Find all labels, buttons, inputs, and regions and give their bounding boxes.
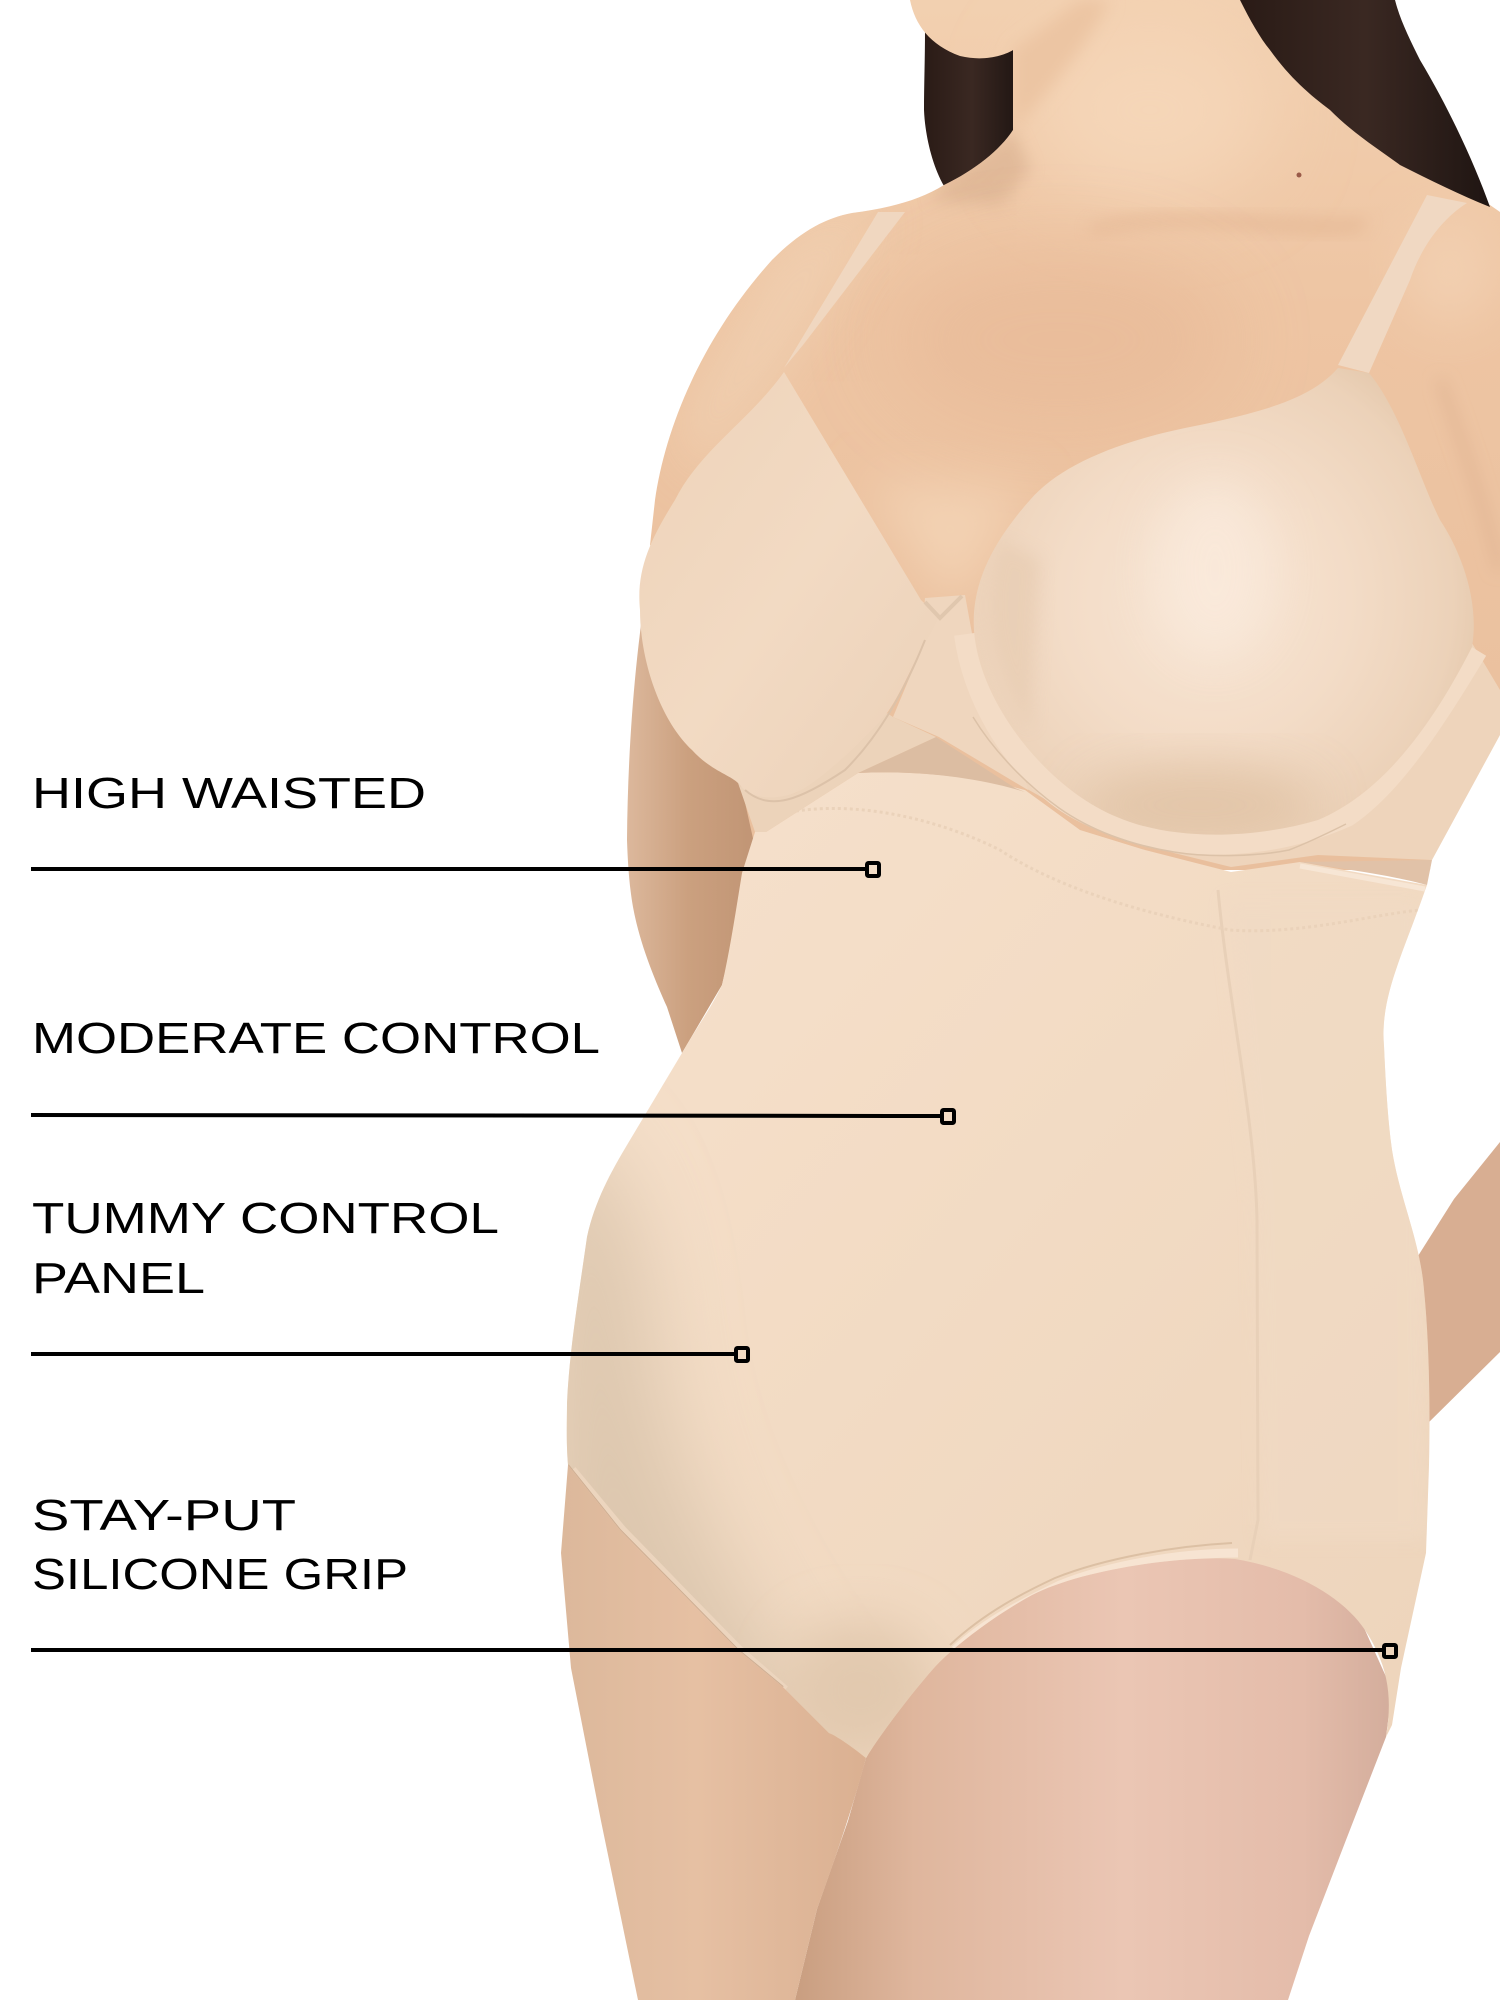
far strap (784, 212, 905, 368)
hair over shoulder (1240, 0, 1490, 207)
label: moderate control: MODERATE CONTROL (32, 1014, 600, 1063)
far cup seam (745, 640, 925, 801)
near cup (960, 360, 1490, 845)
left leg hem (572, 1470, 785, 1690)
callout: tummy control panel (31, 1194, 748, 1361)
centre bridge (893, 595, 1028, 790)
cup highlight (1175, 493, 1258, 610)
leader line and marker (31, 863, 879, 876)
label: tummy control panel: TUMMY CONTROL (32, 1194, 498, 1243)
left side shading (566, 1164, 779, 1677)
neck shadow under hair (940, 134, 1028, 205)
label: stay-put silicone grip: SILICONE GRIP (32, 1550, 408, 1599)
neck highlight (1008, 52, 1246, 196)
far cup (639, 372, 939, 798)
far forearm (1418, 1142, 1500, 1429)
figure: model wearing high-waisted shaper (540, 0, 1500, 2000)
side band (1020, 643, 1500, 867)
right arm crease (1440, 380, 1500, 570)
mole (1296, 172, 1302, 178)
collarbone shading (1112, 214, 1354, 232)
callout: stay-put silicone grip (31, 1491, 1396, 1657)
left leg hem edge (568, 1465, 783, 1687)
waist stitching (790, 808, 1420, 931)
near thigh (795, 1500, 1392, 2000)
leader line and marker (31, 1110, 954, 1123)
torso skin (640, 0, 1500, 880)
sheer mesh gap (858, 737, 1025, 792)
far arm (627, 520, 780, 1053)
far cup under band (738, 713, 936, 832)
sheer mesh gap right (1300, 860, 1432, 885)
chest warm tone (1003, 303, 1117, 356)
side panel light (1384, 944, 1406, 1200)
cleavage highlight (890, 480, 1008, 587)
underwire channel (967, 634, 1475, 842)
callout: high waisted (31, 769, 879, 876)
grip edge (950, 1543, 1232, 1645)
panty shaper (540, 760, 1450, 1770)
underwire seam (973, 717, 1346, 856)
label: high waisted: HIGH WAISTED (32, 769, 426, 818)
bra (639, 195, 1500, 885)
leader line and marker (31, 1645, 1396, 1657)
top hem (1300, 866, 1425, 889)
label: stay-put silicone grip: STAY-PUT (32, 1491, 295, 1540)
side seam (1218, 890, 1258, 1560)
silicone grip (955, 1553, 1238, 1650)
shoulder light (700, 256, 832, 432)
hair behind neck (924, 30, 1020, 186)
callout: moderate control (31, 1014, 954, 1123)
far thigh (561, 1465, 900, 2000)
right shoulder highlight (1422, 242, 1478, 310)
cup left edge shade (998, 554, 1038, 690)
gore knot (925, 596, 962, 618)
jaw shadow (1008, 1, 1102, 112)
near strap (1338, 195, 1467, 373)
leader line and marker (31, 1348, 748, 1361)
cup lower shade (1080, 765, 1320, 845)
label: tummy control panel: PANEL (32, 1254, 205, 1303)
lower fold shade (802, 1619, 930, 1755)
shaper body (540, 760, 1450, 1770)
